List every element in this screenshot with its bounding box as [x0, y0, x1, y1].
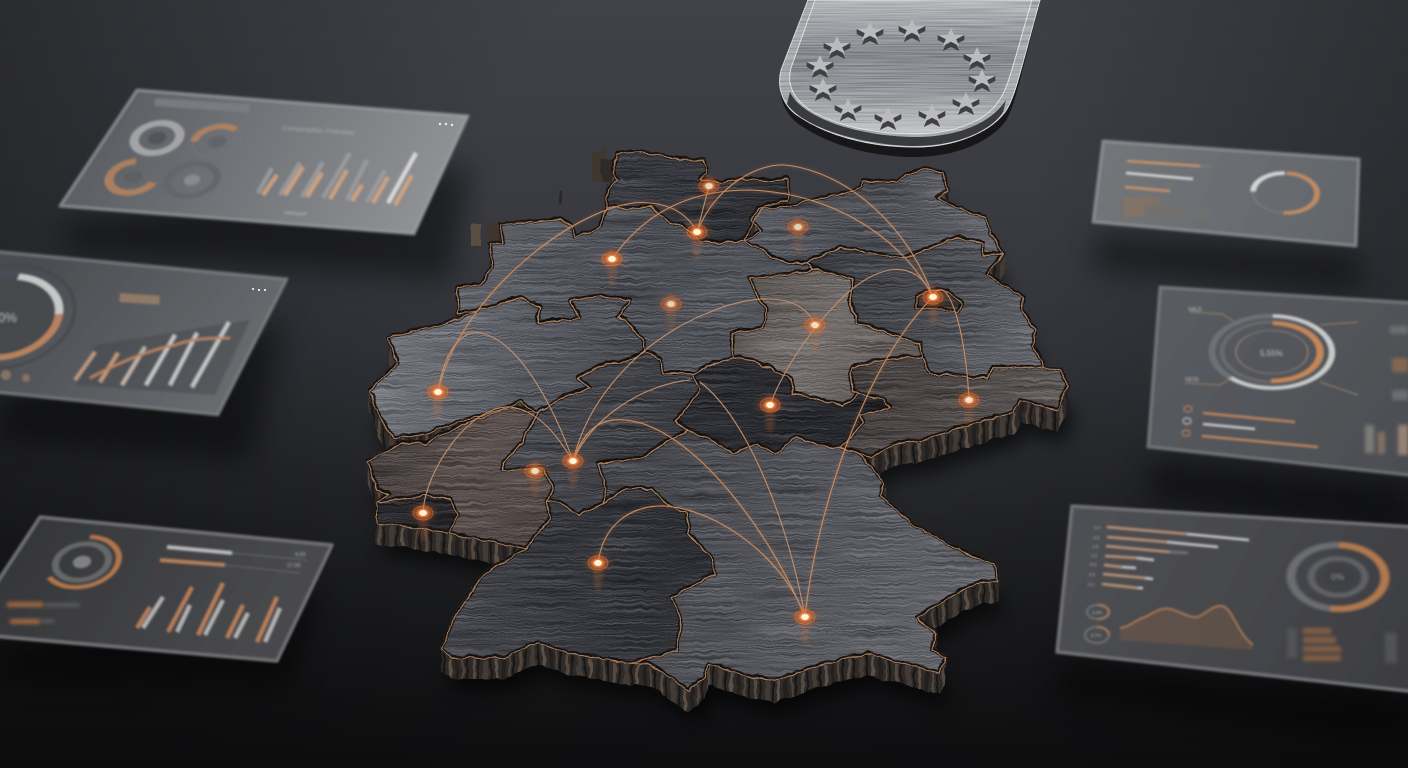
glass card [1093, 141, 1359, 246]
panel shadows on the desk [0, 165, 1408, 740]
node: Duesseldorf [421, 380, 455, 420]
small ring: bottom [1085, 627, 1109, 643]
panel: top-left dashboard, donuts and bar chart [60, 90, 468, 234]
row labels [1088, 525, 1101, 587]
node: Erfurt [753, 393, 787, 433]
coastal islands and fragments [471, 145, 789, 266]
donut: orange right [188, 125, 246, 159]
node: Frankfurt [556, 449, 590, 489]
glass card [1148, 287, 1408, 476]
plaque lower step [780, 0, 1040, 147]
state: Brandenburg [807, 237, 1043, 378]
progress bars [1125, 161, 1212, 191]
map shadow [374, 185, 1074, 724]
status dots [1, 370, 30, 382]
area chart [1120, 606, 1253, 650]
arc glow [438, 165, 933, 617]
node: Magdeburg [798, 313, 832, 353]
callout text [1185, 307, 1202, 383]
state: Rheinland-Pfalz [368, 407, 553, 548]
panel heading [154, 98, 355, 137]
copper arcs [423, 165, 969, 617]
progress bars: 4.XX [295, 552, 307, 558]
network arcs between cities [423, 165, 969, 617]
panel: lower-right dashboard, horizontal bars, area chart and ring [1057, 506, 1408, 692]
window dots [252, 288, 266, 291]
plaque base [780, 3, 1040, 157]
row labels: 3.4 [1094, 525, 1101, 530]
card contents [1123, 161, 1319, 220]
donut: orange lower [104, 160, 162, 194]
legend rows [7, 602, 80, 624]
row labels: 2.0 [1093, 535, 1100, 540]
panel: middle-left dashboard, big ring and bars [0, 251, 287, 415]
big ring gauge [0, 262, 88, 372]
state: Niedersachsen [457, 206, 813, 373]
node: Berlin [916, 285, 950, 325]
node: Mainz [518, 459, 552, 499]
window dots [439, 123, 453, 126]
donut: grey [129, 122, 185, 154]
concentric ring gauge [1211, 315, 1333, 389]
panel: middle-right dashboard, concentric ring and bars [1148, 287, 1408, 476]
small ring: bottom: 0,7% [1091, 633, 1101, 638]
ring gauge [1251, 172, 1319, 214]
mini chart [1123, 197, 1210, 220]
small ring: top: 2,4% [1092, 610, 1102, 615]
row labels: 1.6 [1092, 544, 1099, 549]
state: Thueringen [675, 357, 890, 453]
map: Germany, extruded metal states [368, 145, 1068, 711]
bar chart [75, 320, 250, 395]
state: Bayern [598, 430, 998, 690]
row labels: 0.8 [1090, 562, 1097, 567]
state: Nordrhein-Westfalen [370, 295, 645, 438]
state: Sachsen [840, 357, 1068, 457]
node: Schwerin [781, 215, 815, 255]
callout labels [1185, 312, 1358, 395]
state: Mecklenburg-Vorpommern [745, 168, 1003, 263]
ring gauge [38, 536, 126, 588]
side blur chart [1365, 326, 1408, 455]
card contents [104, 98, 416, 218]
EU stars [807, 19, 995, 130]
panel heading [119, 293, 160, 305]
progress bars [160, 547, 307, 573]
plaque raised face [790, 0, 1032, 134]
row labels: 0.6 [1089, 572, 1096, 577]
node: Dresden [952, 388, 986, 428]
card contents [1085, 525, 1397, 663]
chart legend: Verbrauch [284, 210, 307, 218]
state: Sachsen-Anhalt [732, 268, 923, 405]
state surfaces [368, 151, 1068, 690]
panel heading: Consumption Overview [282, 125, 355, 137]
bar chart: paired bars [258, 153, 416, 205]
state: Saarland [377, 495, 457, 532]
glowing city nodes [406, 174, 986, 645]
ring value: 5,55% [1260, 349, 1283, 358]
extruded side walls [368, 154, 1068, 711]
node: Hamburg [680, 220, 714, 260]
row labels: 1.2 [1091, 553, 1098, 558]
small ring: top [1087, 605, 1109, 619]
big ring gauge [1290, 544, 1386, 610]
bar chart [137, 583, 280, 642]
trend line [90, 338, 230, 378]
callout text: GE1k [1185, 377, 1199, 383]
donut: faint [161, 163, 223, 197]
legend rows [1287, 628, 1397, 663]
panel: lower-left dashboard, ring and bars [0, 517, 332, 661]
node: Munich [788, 605, 822, 645]
state: Hessen [503, 350, 700, 515]
node: Kiel [692, 174, 726, 214]
state: Baden-Wuerttemberg [442, 488, 715, 663]
node: Bremen [595, 247, 629, 287]
horizontal bar chart [1102, 527, 1249, 588]
plaque rim shade [787, 92, 1006, 146]
progress bars [1202, 413, 1318, 447]
glass card [60, 90, 468, 234]
glass card [0, 517, 332, 661]
state: Schleswig-Holstein [607, 151, 788, 243]
EU plaque with ring of twelve stars [780, 0, 1040, 157]
progress bars: 17.XX [287, 563, 301, 569]
bronze state outlines [368, 152, 1068, 691]
glass card [0, 251, 287, 415]
node: Stuttgart [581, 551, 615, 591]
state: Berlin [917, 290, 962, 312]
ring value: 0% [1331, 572, 1344, 582]
node: Saarbruecken [406, 501, 440, 541]
row labels: 0.4 [1088, 582, 1095, 587]
callout text: SALE [1188, 307, 1202, 313]
card contents [1182, 307, 1408, 455]
glass card [1057, 506, 1408, 692]
card contents [7, 536, 307, 642]
card contents [0, 262, 250, 395]
list icons [1182, 406, 1192, 436]
panel: top-right dashboard, bars and ring [1093, 141, 1359, 246]
node: Hannover [654, 292, 688, 332]
